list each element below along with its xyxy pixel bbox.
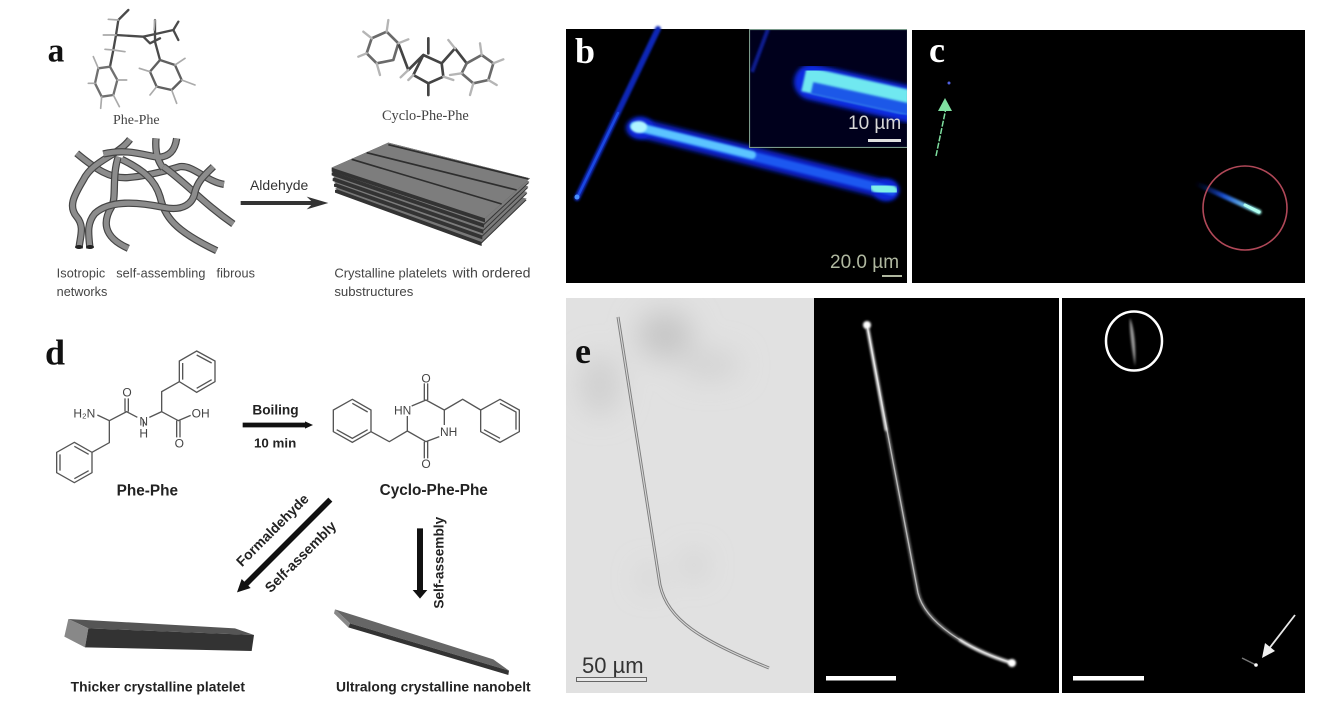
output tip spot (1242, 658, 1258, 667)
stacked crystalline platelets illustration (332, 143, 530, 246)
panel e middle: fluorescence image (814, 298, 1059, 693)
structure: Phe-Phe: N (139, 415, 148, 429)
panel d: chemical scheme (45, 332, 531, 695)
panel letter c: c (929, 30, 945, 70)
panel letter a: a (48, 33, 65, 70)
arrow: vertical to nanobelt: Self-assembly (431, 516, 446, 609)
arrow: Boiling 10 min: 10 min (254, 435, 296, 450)
structure: Cyclo-Phe-Phe: O (421, 372, 431, 386)
arrow: diagonal to platelet: Self-assembly (261, 517, 339, 595)
caption: fibrous networks: Isotropic self-assembling fibrous (57, 266, 255, 280)
structure: Cyclo-Phe-Phe: NH (440, 425, 457, 439)
panel e right: fluorescence image (1062, 298, 1305, 693)
panel letter d: d (45, 332, 65, 372)
blue spot (948, 82, 950, 84)
arrow: Aldehyde (241, 177, 328, 209)
structure: Phe-Phe: OH (192, 406, 210, 420)
inset magnified rod (749, 29, 907, 148)
label: Cyclo-Phe-Phe: Cyclo-Phe-Phe (382, 108, 469, 124)
scale: 20.0 µm: 20.0 µm (830, 252, 899, 273)
inset scale: 10 µm: 10 µm (848, 113, 901, 134)
caption: fibrous networks: networks (57, 285, 107, 299)
arrow: Aldehyde: Aldehyde (250, 177, 309, 193)
scale: 50 µm: 50 µm (582, 653, 644, 678)
arrow: vertical to nanobelt (413, 516, 446, 609)
nanobelt illustration (334, 609, 509, 675)
arrow: Boiling 10 min: Boiling (252, 402, 299, 417)
arrow: diagonal to platelet (233, 490, 339, 595)
scale bar (826, 676, 896, 680)
structure: Phe-Phe: H (139, 426, 148, 440)
caption: fibrous networks (57, 266, 255, 299)
structure: Phe-Phe: H₂N (73, 406, 95, 420)
arrow: Boiling 10 min (243, 402, 313, 450)
structure: Phe-Phe: O (122, 386, 132, 400)
molecule: Cyclo-Phe-Phe 3D model (358, 20, 503, 95)
caption: thicker platelet: Thicker crystalline platelet (71, 679, 245, 695)
panel c: fluorescence micrograph (912, 30, 1305, 283)
structure: Phe-Phe (57, 351, 215, 483)
structure: Cyclo-Phe-Phe (333, 372, 519, 471)
panel b: fluorescence micrograph (566, 29, 925, 283)
structure: Cyclo-Phe-Phe: HN (394, 403, 411, 417)
panel letter b: b (575, 31, 595, 71)
molecule: Phe-Phe 3D model (88, 10, 195, 108)
caption: crystalline platelets: with ordered (452, 265, 531, 281)
main glowing rod (626, 117, 899, 201)
circled tip emission (1106, 312, 1162, 370)
scale bar (1073, 676, 1144, 680)
label: Phe-Phe bold: Phe-Phe (117, 483, 178, 500)
caption: crystalline platelets: Crystalline platelets (334, 265, 447, 280)
white arrow (1262, 615, 1295, 658)
label: Phe-Phe: Phe-Phe (113, 113, 160, 128)
bright-field nanobelt (618, 317, 769, 668)
thicker platelet illustration (64, 619, 254, 651)
fibrous network illustration (72, 138, 233, 251)
arrow: diagonal to platelet: Formaldehyde (233, 490, 312, 569)
caption: crystalline platelets: substructures (334, 284, 414, 299)
green arrow (936, 98, 952, 156)
caption: nanobelt: Ultralong crystalline nanobelt (336, 679, 531, 695)
thin rod (574, 29, 658, 200)
panel a: Phe-Phe to platelets scheme (48, 10, 531, 299)
panel letter e: e (575, 331, 591, 371)
structure: Cyclo-Phe-Phe: O (421, 457, 431, 471)
structure: Phe-Phe: O (175, 436, 184, 450)
caption: crystalline platelets (334, 265, 531, 299)
label: Cyclo-Phe-Phe bold: Cyclo-Phe-Phe (380, 482, 488, 499)
background blotches (580, 307, 722, 409)
panel e: bright-field image (566, 298, 814, 693)
red circle with rod (1195, 166, 1287, 250)
glowing nanobelt (863, 321, 1016, 667)
